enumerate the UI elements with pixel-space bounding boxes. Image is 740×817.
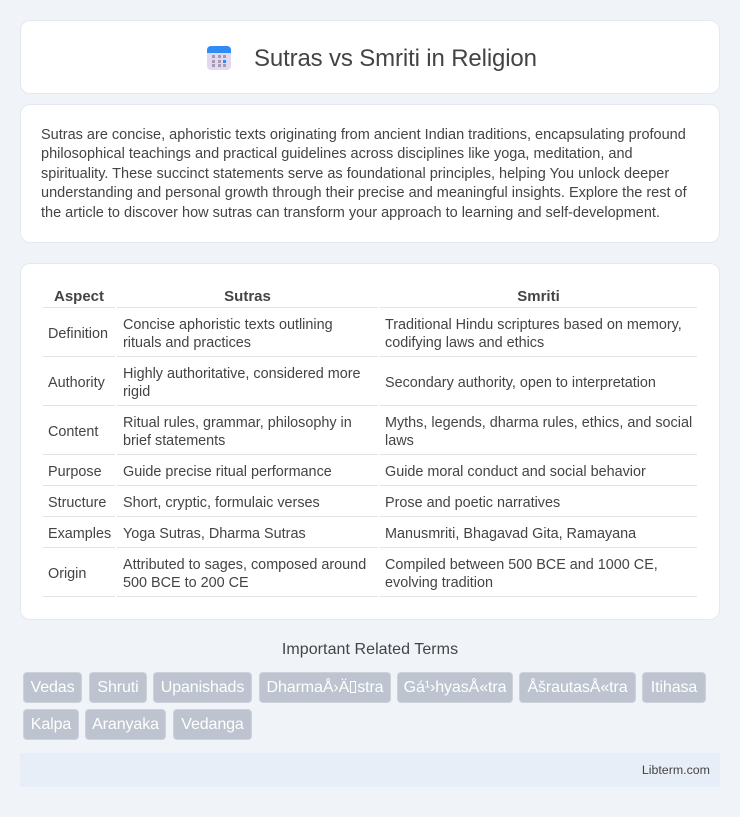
text block: introduction: understanding and personal growth through their precise and meaningful insights. Explore the rest of bbox=[41, 185, 687, 201]
table row: Authority: Secondary authority, open to interpretation bbox=[385, 375, 656, 391]
icon: calendar bbox=[207, 46, 231, 70]
table row: Origin: Origin bbox=[48, 566, 86, 582]
title: Sutras vs Smriti in Religion bbox=[254, 45, 537, 72]
text block: introduction: spirituality. These succinct statements serve as foundational principles, helping You unlock deeper bbox=[41, 166, 669, 182]
panel: introduction bbox=[20, 104, 720, 243]
table row: Content: brief statements bbox=[123, 433, 225, 449]
table row: Content: Myths, legends, dharma rules, ethics, and social bbox=[385, 415, 692, 431]
table header: Sutras: Sutras bbox=[224, 288, 271, 305]
table row: Origin bbox=[43, 557, 697, 597]
table row: Definition: Concise aphoristic texts outlining bbox=[123, 317, 333, 333]
table row: Definition: codifying laws and ethics bbox=[385, 335, 544, 351]
related terms tags: Vedanga bbox=[181, 716, 244, 733]
table row: Examples bbox=[43, 526, 697, 548]
related terms tags: Upanishads bbox=[161, 679, 244, 696]
related terms tags: Vedas bbox=[30, 679, 74, 696]
text block: introduction: Sutras are concise, aphoristic texts originating from ancient Indian traditions, encapsulating profound bbox=[41, 127, 686, 143]
table row: Structure: Short, cryptic, formulaic verses bbox=[123, 495, 320, 511]
table row: Origin: Attributed to sages, composed around bbox=[123, 557, 366, 573]
related terms tags: Gá¹›hyasÅ«tra bbox=[404, 679, 506, 696]
table row: Authority: Highly authoritative, considered more bbox=[123, 366, 361, 382]
table row: Definition: rituals and practices bbox=[123, 335, 251, 351]
table row: Definition: Traditional Hindu scriptures based on memory, bbox=[385, 317, 682, 333]
table row: Definition bbox=[43, 317, 697, 357]
footer credit: Libterm.com bbox=[642, 763, 710, 777]
table row: Structure bbox=[43, 495, 697, 517]
table row: Origin: evolving tradition bbox=[385, 575, 493, 591]
related terms tags: Kalpa bbox=[31, 716, 71, 733]
related terms tags: ÅšrautasÅ«tra bbox=[527, 679, 628, 696]
related terms tags bbox=[23, 672, 706, 740]
table row: Examples: Yoga Sutras, Dharma Sutras bbox=[123, 526, 306, 542]
text block: introduction bbox=[41, 127, 687, 221]
table row: Structure: Prose and poetic narratives bbox=[385, 495, 560, 511]
table row: Origin: Compiled between 500 BCE and 1000 CE, bbox=[385, 557, 658, 573]
table row: Origin: 500 BCE to 200 CE bbox=[123, 575, 249, 591]
table row: Authority: Authority bbox=[48, 375, 105, 391]
related terms tags: Shruti bbox=[97, 679, 139, 696]
table row: Purpose: Purpose bbox=[48, 464, 102, 480]
table row: Content: laws bbox=[385, 433, 414, 449]
footer bar bbox=[20, 753, 720, 787]
heading: related terms: Important Related Terms bbox=[282, 641, 458, 658]
table row: Examples: Manusmriti, Bhagavad Gita, Ramayana bbox=[385, 526, 636, 542]
table row: Authority: rigid bbox=[123, 384, 150, 400]
table row: Examples: Examples bbox=[48, 526, 111, 542]
text block: introduction: philosophical teachings and practical guidelines across disciplines like yoga, meditation, and bbox=[41, 146, 633, 162]
table row: Structure: Structure bbox=[48, 495, 106, 511]
table row: Purpose: Guide precise ritual performance bbox=[123, 464, 332, 480]
related terms tags: Aranyaka bbox=[92, 716, 159, 733]
table row: Definition: Definition bbox=[48, 326, 108, 342]
related terms tags: Itihasa bbox=[651, 679, 697, 696]
table row: Content bbox=[43, 415, 697, 455]
table header: Smriti: Smriti bbox=[517, 288, 560, 305]
text block: introduction: the article to discover how sutras can transform your approach to learning and self-development. bbox=[41, 205, 660, 221]
table row: Content: Content bbox=[48, 424, 98, 440]
table row: Content: Ritual rules, grammar, philosophy in bbox=[123, 415, 352, 431]
panel: title card bbox=[20, 20, 720, 94]
panel: comparison table bbox=[20, 263, 720, 620]
table row: Purpose: Guide moral conduct and social behavior bbox=[385, 464, 646, 480]
table row: Purpose bbox=[43, 464, 697, 486]
table header: Aspect: Aspect bbox=[54, 288, 104, 305]
related terms tags: DharmaÅ›Ä stra bbox=[267, 679, 383, 696]
table row: Authority bbox=[43, 366, 697, 406]
